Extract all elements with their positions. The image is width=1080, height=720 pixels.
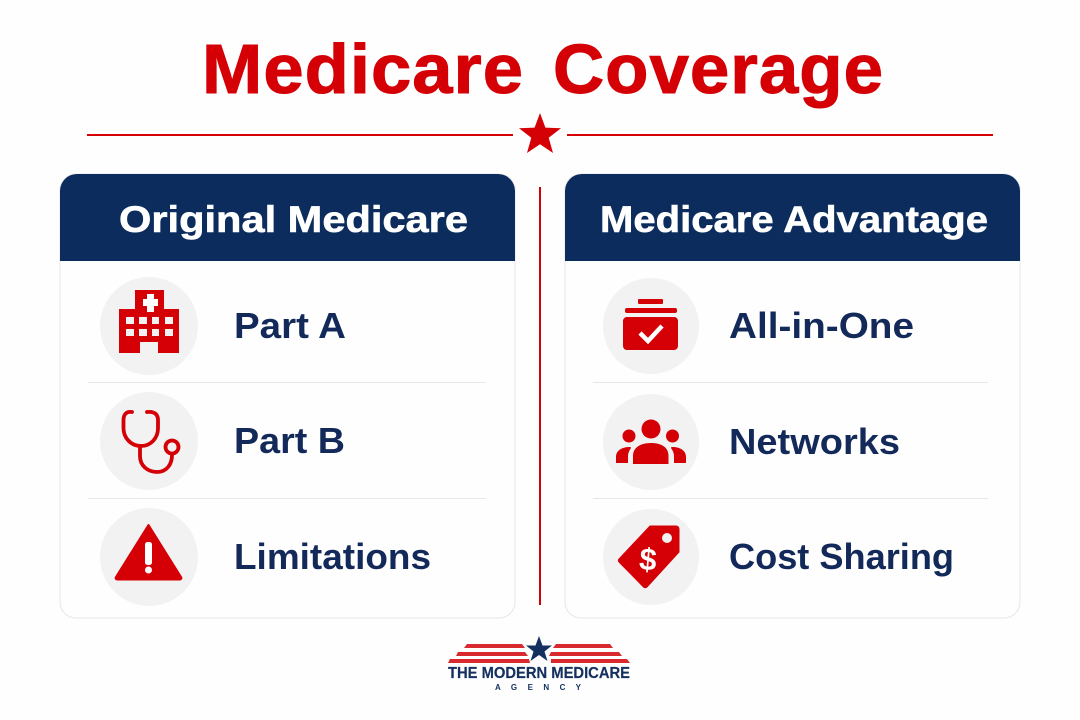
logo subtitle: A G E N C Y [495,683,582,692]
title [202,30,884,108]
row: Part A [100,277,346,375]
panel header [60,174,515,261]
row: Part B [100,392,345,490]
icon: warning triangle [116,525,181,580]
panel: Original Medicare [60,174,515,618]
row: All-in-One [603,278,914,374]
icon: stethoscope [124,412,178,472]
title: Coverage [553,30,884,108]
title divider with star [87,113,993,153]
logo: The Modern Medicare Agency [448,636,630,692]
heading: Medicare Advantage: Medicare Advantage [600,199,988,240]
logo wings [448,644,630,663]
logo wordmark: THE MODERN MEDICARE [448,665,630,682]
center divider [539,187,541,605]
icon: price tag [618,526,679,588]
row: Cost Sharing [603,509,954,605]
label: Networks: Networks [729,421,900,462]
logo star [526,636,552,661]
row: Networks [603,394,900,490]
row: Limitations [100,508,431,606]
panel: Medicare Advantage [565,174,1020,618]
label: Part A: Part A [234,305,346,346]
label: Cost Sharing: Cost Sharing [729,536,954,577]
label: All-in-One: All-in-One [729,305,914,346]
heading: Original Medicare: Original Medicare [119,199,468,240]
title: Medicare [202,30,524,108]
panel header [565,174,1020,261]
label: Limitations: Limitations [234,536,431,577]
icon: checked folder [623,299,678,350]
icon: people group [616,420,686,464]
icon: hospital [119,290,179,353]
icon: price tag: $ [638,541,658,578]
label: Part B: Part B [234,420,345,461]
